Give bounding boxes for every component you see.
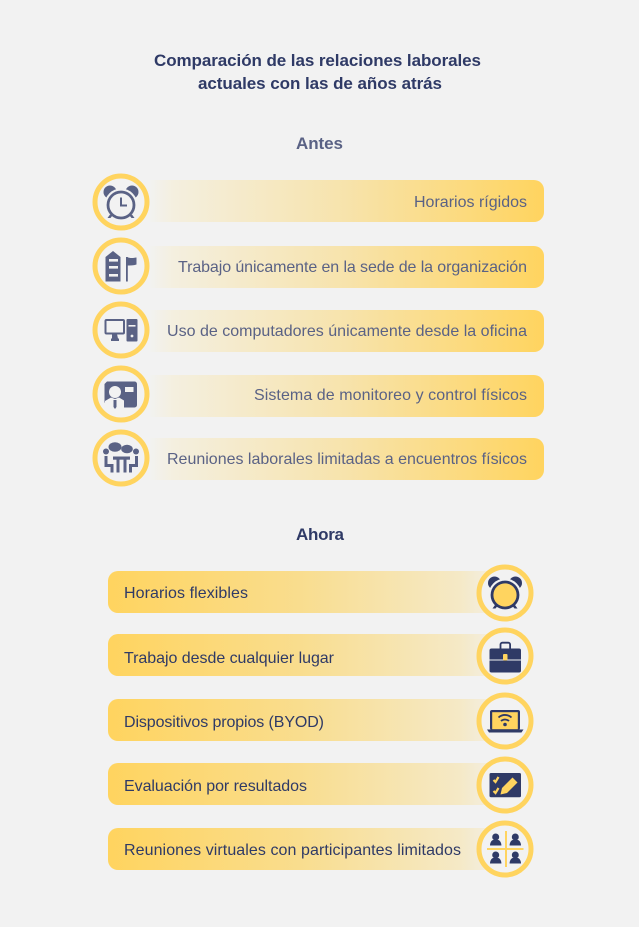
icon: yellow alarm clock xyxy=(488,576,522,612)
row: monitoreo xyxy=(95,368,544,420)
row: trabajo en sede xyxy=(95,240,544,292)
icon: alarm clock xyxy=(104,186,138,222)
row: monitoreo: Sistema de monitoreo y control físicos xyxy=(254,387,527,404)
icon: briefcase xyxy=(490,643,521,672)
row: cualquier lugar: Trabajo desde cualquier lugar xyxy=(124,650,335,667)
icon: laptop with wifi xyxy=(487,710,524,732)
title xyxy=(154,51,481,93)
heading: Ahora: Ahora xyxy=(296,525,345,544)
row: computadores xyxy=(95,304,544,356)
panel: Ahora list xyxy=(108,567,531,875)
panel: Antes list xyxy=(95,176,544,484)
row: reuniones físicas: Reuniones laborales limitadas a encuentros físicos xyxy=(167,451,527,468)
row: evaluación por resultados xyxy=(108,759,531,811)
title: actuales con las de años atrás xyxy=(198,74,442,93)
icon: four participants grid xyxy=(487,831,524,867)
row: dispositivos propios xyxy=(108,695,531,747)
row: reuniones virtuales: Reuniones virtuales con participantes limitados xyxy=(124,842,461,859)
icon: building with flag xyxy=(106,251,136,282)
row: horarios rígidos: Horarios rígidos xyxy=(414,194,527,211)
icon: monitoring screen xyxy=(104,382,137,409)
row: evaluación por resultados: Evaluación por resultados xyxy=(124,778,307,795)
row: horarios flexibles: Horarios flexibles xyxy=(124,585,248,602)
icon: desktop computer xyxy=(106,319,138,342)
icon: meeting table xyxy=(103,442,139,472)
row: computadores: Uso de computadores únicamente desde la oficina xyxy=(167,323,527,340)
title: Comparación de las relaciones laborales xyxy=(154,51,481,70)
row: reuniones virtuales xyxy=(108,823,531,875)
row: horarios rígidos xyxy=(95,176,544,228)
heading: Antes: Antes xyxy=(296,134,343,153)
icon: checklist and pencil xyxy=(490,773,521,797)
row: trabajo en sede: Trabajo únicamente en la sede de la organización xyxy=(178,259,527,276)
row: dispositivos propios: Dispositivos propios (BYOD) xyxy=(124,714,324,731)
row: cualquier lugar xyxy=(108,630,531,682)
row: reuniones físicas xyxy=(95,432,544,484)
row: horarios flexibles xyxy=(108,567,531,619)
